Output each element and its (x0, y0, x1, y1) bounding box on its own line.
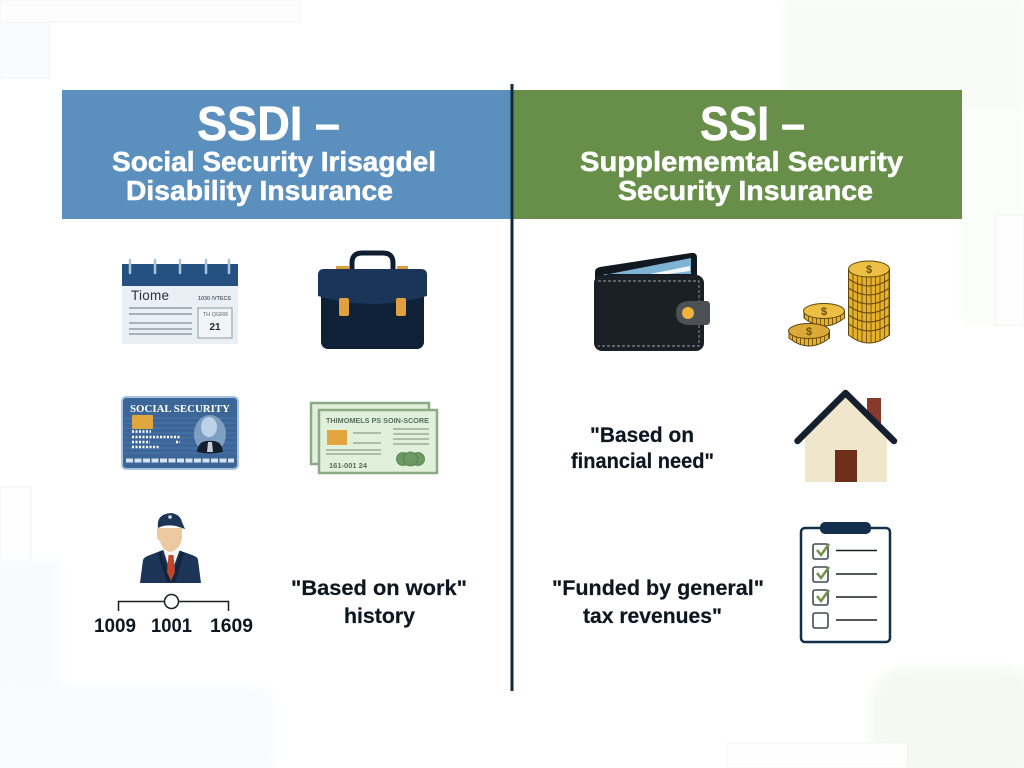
text: based on work history: history (344, 605, 415, 628)
subheading: SSI name line 1: Supplememtal Security (580, 146, 903, 177)
icon: coins: $ (821, 306, 827, 318)
icon: benefit check: THIMOMELS PS SOIN-SCORE (326, 416, 429, 425)
text: funded by general tax revenues: tax revenues" (583, 605, 722, 628)
subheading: SSDI name line 2: Disability Insurance (126, 175, 393, 206)
icon: social security card (122, 397, 238, 469)
icon: coins (788, 261, 890, 346)
icon: worker (140, 513, 201, 583)
icon: calendar: Tiome (131, 288, 169, 303)
icon: calendar: 1030 /VTECS (198, 296, 231, 302)
subheading: SSDI name line 1: Social Security Irisagdel (112, 146, 436, 177)
icon: coins: $ (866, 264, 872, 276)
timeline labels: 1001 (151, 616, 192, 637)
timeline labels: 1009 (94, 616, 136, 637)
icon: calendar: TH QGRR (203, 312, 228, 318)
text: based on work history: "Based on work" (291, 577, 467, 600)
icon: benefit check: 161-001 24 (329, 461, 368, 470)
timeline labels (94, 616, 253, 637)
panel: SSDI header (62, 90, 512, 219)
small coins (788, 304, 844, 346)
subheading: SSI name line 2: Security Insurance (618, 175, 873, 206)
icon: checklist (801, 522, 890, 642)
icon: calendar: 21 (209, 322, 221, 333)
text: based on financial need: "Based on (590, 424, 694, 447)
icon: house (798, 393, 894, 482)
timeline labels: 1609 (210, 616, 253, 637)
text: funded by general tax revenues: "Funded by general" (552, 577, 764, 600)
panel: SSI header (512, 90, 962, 219)
center divider (510, 84, 514, 691)
text: funded by general tax revenues (552, 577, 764, 628)
heading: SSDI: SSDI – (197, 98, 340, 151)
icon: social security card: SOCIAL SECURITY (130, 404, 231, 415)
text: based on financial need (571, 424, 714, 473)
icon: benefit check (311, 403, 437, 473)
text: based on work history (291, 577, 467, 628)
text: based on financial need: financial need" (571, 450, 714, 473)
icon: coins: $ (806, 326, 812, 338)
icon: calendar (122, 260, 238, 344)
icon: briefcase (318, 253, 427, 349)
icon: worker with timeline (94, 513, 253, 637)
coin stack (848, 261, 890, 343)
icon: wallet (594, 253, 710, 351)
heading: SSI: SSI – (700, 98, 805, 151)
timeline (118, 602, 228, 611)
